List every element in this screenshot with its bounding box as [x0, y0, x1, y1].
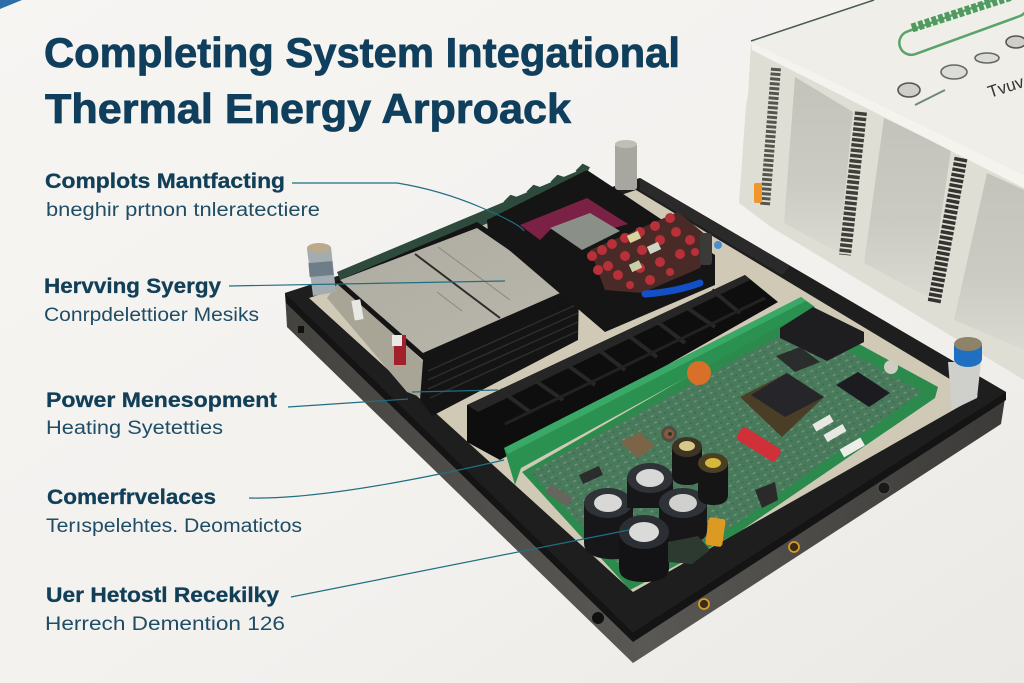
label: reliability: Uer Hetostl Recekilky: [46, 584, 279, 607]
callout line 5: [291, 530, 629, 597]
label: reliability: Herrech Demention 126: [45, 614, 285, 635]
label: manufacturing: [45, 170, 320, 221]
icon: black heat sink row: [467, 275, 778, 460]
label: power: Power Menesopment: [46, 389, 277, 412]
label: power: Heating Syetetties: [46, 418, 223, 439]
label: manufacturing: Complots Mantfacting: [45, 170, 285, 193]
icon: tray frame: [285, 178, 1006, 663]
title: [44, 29, 680, 132]
icon: cylinder left: [307, 243, 336, 296]
icon: green circuit board: [504, 297, 938, 590]
icon: back edge strip: [337, 166, 596, 292]
label: manufacturing: bneghir prtnon tnleratectiere: [46, 200, 320, 221]
callout line 1: [292, 183, 524, 231]
label: synergy: [44, 275, 259, 326]
label: power: [46, 389, 277, 439]
label: comfort: Terıspelehtes. Deomatictos: [46, 516, 302, 537]
callout line 2: [229, 281, 505, 286]
title: Thermal Energy Arproack: [45, 85, 572, 132]
callout line 3: [288, 390, 498, 407]
icon: battery stack: [327, 222, 579, 416]
title: Completing System Integational: [44, 29, 680, 76]
icon: relay module: [487, 170, 722, 332]
label: comfort: [46, 486, 302, 537]
icon: silver device: [739, 0, 1024, 380]
callout line 4: [249, 460, 504, 498]
label: synergy: Conrpdelettioer Mesiks: [44, 305, 259, 326]
label: reliability: [45, 584, 285, 635]
corner accent: [0, 0, 22, 9]
icon: cylinder back: [615, 140, 637, 190]
label: synergy: Hervving Syergy: [44, 275, 221, 298]
icon: capacitors: [584, 437, 728, 582]
label: comfort: Comerfrvelaces: [47, 486, 216, 509]
icon: blue top cylinder: [948, 337, 982, 410]
